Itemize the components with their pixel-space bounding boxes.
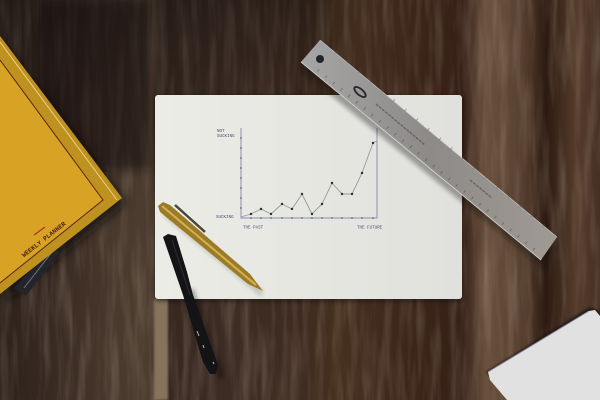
ruler logo (353, 85, 367, 99)
data line (241, 141, 377, 217)
line chart (216, 128, 383, 230)
axes (241, 128, 377, 218)
steel ruler (300, 40, 557, 270)
dash ornament (34, 227, 45, 235)
book shadow and object beneath (5, 43, 127, 303)
pen print dots (197, 331, 214, 364)
ruler markings (376, 104, 425, 145)
data points (250, 142, 374, 215)
gold pen (158, 202, 263, 294)
chart labels: SUCKING (216, 216, 234, 220)
notepad (486, 307, 600, 400)
inner border (0, 60, 103, 283)
chart labels: NOT (217, 130, 225, 134)
chart labels (216, 130, 383, 230)
book title: WEEKLY PLANNER (21, 220, 68, 259)
black pen (163, 234, 222, 378)
ruler hanging hole (316, 55, 324, 63)
white paper sheet (155, 95, 463, 301)
chart labels: THE PAST (243, 226, 264, 230)
yellow weekly planner book (0, 36, 122, 294)
chart labels: THE FUTURE (357, 226, 383, 230)
axis ticks (240, 138, 373, 219)
chart labels: SUCKING (217, 135, 235, 139)
cream page edge (0, 42, 117, 200)
pen clip (175, 205, 205, 232)
